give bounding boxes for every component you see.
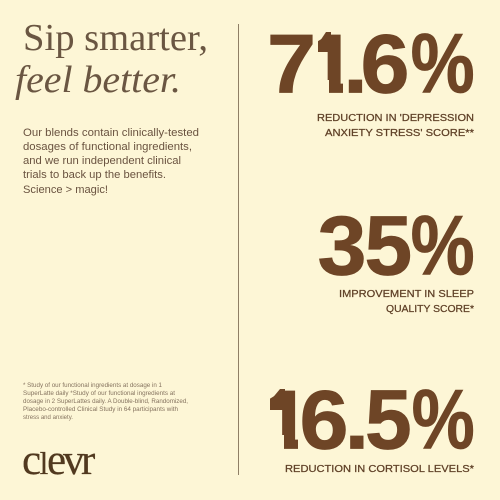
footnote: Placebo-controlled Clinical Study in 64 participants with [23,407,178,413]
footnote: dosage in 2 SuperLattes daily. A Double-blind, Randomized, [23,399,188,405]
stat: 16.5%: REDUCTION IN CORTISOL LEVELS* [285,463,474,475]
stat: 71.6%: 7 [267,17,316,111]
body text [23,127,199,196]
logo: clevr: r [81,437,95,484]
footnote [23,383,188,421]
logo: clevr: l [40,445,48,481]
stat: 71.6%: 6 [360,17,410,111]
logo: clevr [22,437,95,484]
body text: dosages of functional ingredients, [23,141,192,153]
footnote: stress and anxiety. [23,415,73,421]
stat: 71.6%: 1 [308,17,357,111]
stat: 71.6%: ANXIETY STRESS' SCORE** [325,127,474,139]
stat: 71.6%: % [411,16,475,111]
divider [238,24,239,475]
stat: 35%: 5 [364,198,412,292]
body text: trials to back up the benefits. [23,169,166,181]
title: feel better. [15,59,181,101]
footnote: * Study of our functional ingredients at dosage in 1 [23,383,163,389]
stat: 16.5%: 1 [262,373,311,467]
stat: 35%: QUALITY SCORE* [386,303,474,315]
title: Sip smarter, [23,17,208,59]
stat: 35% [318,198,475,315]
stat: 16.5% [270,389,474,472]
body text: Our blends contain clinically-tested [23,127,199,139]
stat: 35%: % [411,198,475,293]
stat: 16.5%: 5 [365,372,412,466]
title [15,17,208,101]
stat: 71.6%: . [343,17,368,111]
logo: clevr: v [63,437,85,484]
body text: Science > magic! [23,184,108,196]
body text: and we run independent clinical [23,155,181,167]
logo: clevr: c [22,437,41,484]
logo: clevr: e [47,437,66,484]
stat: 16.5%: . [345,373,369,467]
stat: 16.5%: 6 [300,373,349,467]
stat: 71.6% [270,32,474,136]
stat: 35%: IMPROVEMENT IN SLEEP [339,288,474,300]
stat: 35%: 3 [318,199,367,293]
stat: 16.5%: % [412,374,475,467]
stat: 71.6%: REDUCTION IN 'DEPRESSION [317,112,474,124]
footnote: SuperLatte daily *Study of our functional ingredients at [23,391,175,397]
